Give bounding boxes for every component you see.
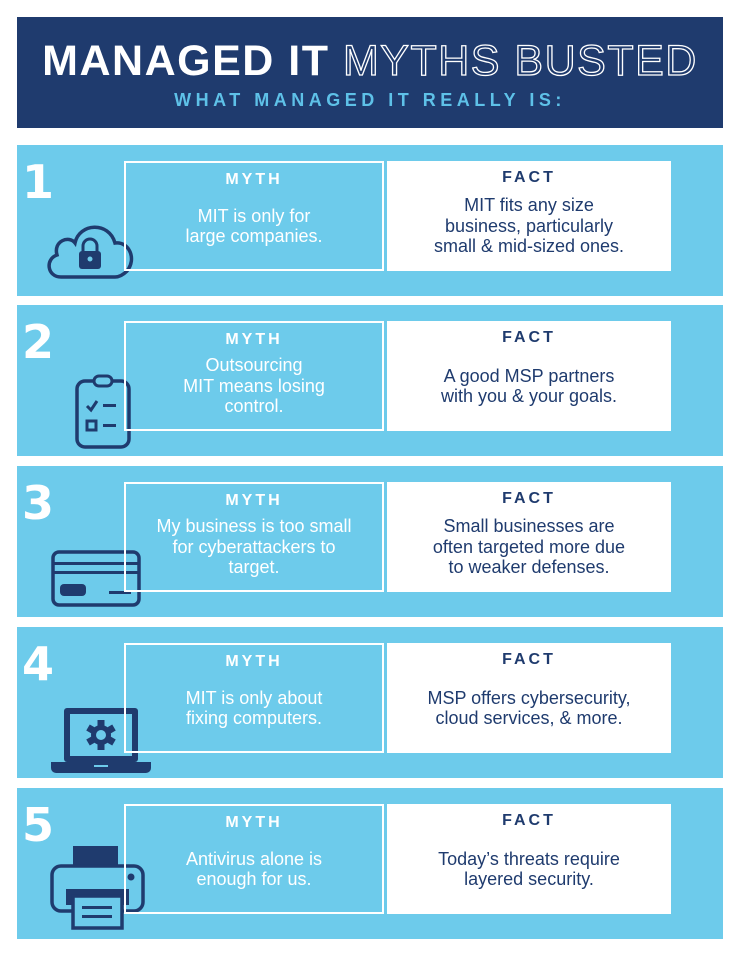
fact box: FACT: [502, 169, 556, 186]
header banner: [17, 17, 723, 128]
fact box: [387, 804, 671, 914]
fact box: business, particularly: [445, 216, 613, 236]
fact box: small & mid-sized ones.: [434, 236, 624, 256]
myth box: MYTH: [225, 814, 283, 831]
fact box: FACT: [502, 651, 556, 668]
panel: myth 2: [17, 305, 723, 456]
fact box: FACT: [502, 490, 556, 507]
panel: myth 5: [17, 788, 723, 939]
myth box: MYTH: [225, 492, 283, 509]
panel: myth 4: [17, 627, 723, 778]
myth box: Outsourcing: [205, 355, 303, 375]
myth box: MIT means losing: [183, 376, 325, 396]
myth box: target.: [228, 557, 280, 577]
title: MANAGED IT MYTHS BUSTED: [42, 37, 698, 85]
fact box: cloud services, & more.: [435, 708, 623, 728]
myth box: MYTH: [225, 653, 283, 670]
fact box: FACT: [502, 812, 556, 829]
number 5: 5: [22, 798, 54, 852]
myth box: [124, 482, 384, 592]
myth box: [124, 161, 384, 271]
fact box: layered security.: [464, 869, 594, 889]
myth box: [124, 643, 384, 753]
number 1: 1: [22, 155, 54, 209]
icon: printer: [50, 846, 145, 930]
myth box: [124, 321, 384, 431]
fact box: MIT fits any size: [464, 195, 594, 215]
number 2: 2: [22, 315, 54, 369]
subtitle: WHAT MANAGED IT REALLY IS:: [174, 90, 566, 110]
fact box: FACT: [502, 329, 556, 346]
myth box: control.: [224, 396, 284, 416]
fact box: with you & your goals.: [441, 386, 617, 406]
fact box: Today’s threats require: [438, 848, 620, 868]
myth box: MIT is only for: [198, 206, 310, 226]
number 3: 3: [22, 476, 54, 530]
myth box: MIT is only about: [186, 688, 322, 708]
fact box: Small businesses are: [443, 516, 615, 536]
fact box: A good MSP partners: [444, 366, 614, 386]
myth box: My business is too small: [156, 516, 352, 536]
myth box: enough for us.: [196, 869, 312, 889]
fact box: [387, 321, 671, 431]
myth box: MYTH: [225, 171, 283, 188]
fact box: [387, 482, 671, 592]
myth box: for cyberattackers to: [172, 537, 336, 557]
number 4: 4: [22, 637, 54, 691]
fact box: to weaker defenses.: [448, 557, 610, 577]
myth box: Antivirus alone is: [186, 848, 322, 868]
fact box: MSP offers cybersecurity,: [427, 688, 631, 708]
myth box: fixing computers.: [186, 708, 322, 728]
icon: cloud lock: [47, 226, 134, 279]
panel: myth 3: [17, 466, 723, 617]
fact box: [387, 643, 671, 753]
myth box: [124, 804, 384, 914]
myth box: large companies.: [185, 226, 323, 246]
icon: laptop gear: [51, 708, 151, 773]
fact box: [387, 161, 671, 271]
myth box: MYTH: [225, 331, 283, 348]
fact box: often targeted more due: [433, 537, 625, 557]
panel: myth 1: [17, 145, 723, 296]
icon: clipboard: [75, 374, 131, 449]
icon: credit card: [51, 550, 141, 607]
